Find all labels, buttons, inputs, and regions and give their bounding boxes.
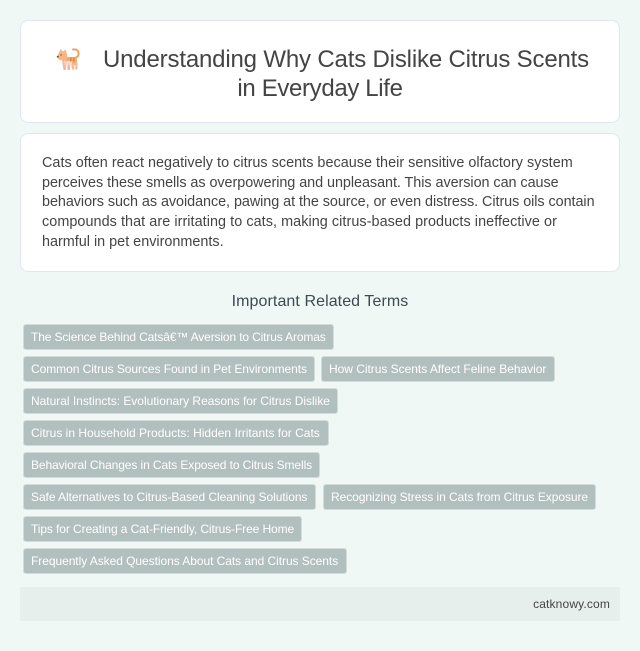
title: Understanding Why Cats Dislike Citrus Scents xyxy=(103,46,589,73)
tag xyxy=(23,484,316,510)
panel: title card xyxy=(20,20,620,123)
tag xyxy=(321,356,555,382)
summary text: Cats often react negatively to citrus scents because their sensitive olfactory system xyxy=(42,155,573,171)
tag xyxy=(23,452,320,478)
summary text: behaviors such as avoidance, pawing at the source, or even distress. Citrus oils contain xyxy=(42,194,595,210)
heading: important related terms: Important Related Terms xyxy=(232,293,408,310)
panel: summary card xyxy=(20,133,620,272)
tag: Behavioral Changes in Cats Exposed to Citrus Smells xyxy=(31,458,312,472)
tag: The Science Behind Catsâ€™ Aversion to Citrus Aromas xyxy=(31,330,326,344)
tag: Natural Instincts: Evolutionary Reasons for Citrus Dislike xyxy=(31,394,330,408)
title xyxy=(103,46,589,102)
tag xyxy=(23,356,315,382)
tag xyxy=(23,420,329,446)
summary text: perceives these smells as overpowering and unpleasant. This aversion can cause xyxy=(42,175,559,191)
summary text: compounds that are irritating to cats, making citrus-based products ineffective or xyxy=(42,214,557,230)
footer source text: catknowy.com xyxy=(533,597,610,611)
tag xyxy=(23,516,302,542)
tag xyxy=(23,324,334,350)
tag: Tips for Creating a Cat-Friendly, Citrus-Free Home xyxy=(31,522,294,536)
tag: Citrus in Household Products: Hidden Irritants for Cats xyxy=(31,426,320,440)
title: in Everyday Life xyxy=(237,75,403,102)
tag list xyxy=(23,324,596,574)
tag xyxy=(23,548,347,574)
tag: Common Citrus Sources Found in Pet Environments xyxy=(31,362,307,376)
tag: Frequently Asked Questions About Cats and Citrus Scents xyxy=(31,554,338,568)
tag xyxy=(23,388,338,414)
tag: Recognizing Stress in Cats from Citrus Exposure xyxy=(331,490,588,504)
icon: cat xyxy=(56,48,80,70)
summary text xyxy=(42,155,595,250)
tag: Safe Alternatives to Citrus-Based Cleaning Solutions xyxy=(31,490,307,504)
summary text: harmful in pet environments. xyxy=(42,234,224,250)
tag: How Citrus Scents Affect Feline Behavior xyxy=(329,362,546,376)
tag xyxy=(323,484,596,510)
footer bar xyxy=(20,587,620,621)
